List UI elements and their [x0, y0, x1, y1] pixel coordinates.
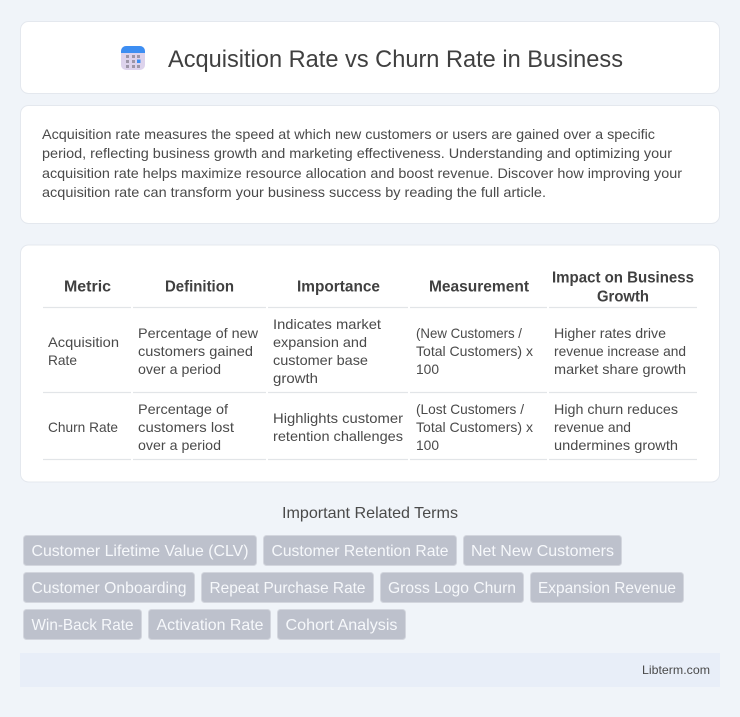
table row: acquisition rate: revenue increase and: [554, 343, 686, 359]
tag: net new customers: Net New Customers: [471, 543, 614, 560]
tag: customer retention rate: [264, 536, 456, 566]
table row: acquisition rate: market share growth: [554, 361, 686, 377]
text block: introduction: Acquisition rate measures the speed at which new customers or users are gained over a specific: [42, 126, 655, 142]
table row: acquisition rate: Total Customers) x: [416, 343, 533, 359]
heading: related terms: Important Related Terms: [282, 505, 458, 522]
table row: churn rate: retention challenges: [273, 428, 403, 444]
table row: acquisition rate: [48, 316, 686, 386]
tag: cohort analysis: Cohort Analysis: [286, 617, 398, 634]
table row: churn rate: 100: [416, 437, 439, 453]
table header row: Impact on Business: [552, 270, 694, 286]
tag: gross logo churn: [380, 572, 524, 602]
table row: acquisition rate: customers gained: [138, 343, 253, 359]
tag: win-back rate: [24, 610, 142, 640]
text block: introduction: acquisition rate can transform your business success by reading the full article.: [42, 184, 546, 200]
tag: gross logo churn: Gross Logo Churn: [388, 580, 516, 597]
footer credit: Libterm.com: [642, 663, 710, 677]
tag: repeat purchase rate: [202, 572, 374, 602]
table row: acquisition rate: Rate: [48, 352, 77, 368]
table row: churn rate: customers lost: [138, 419, 234, 435]
panel: comparison table: [20, 245, 720, 482]
table row: acquisition rate: 100: [416, 361, 439, 377]
table row: churn rate: over a period: [138, 437, 221, 453]
table header row: Definition: [165, 278, 234, 296]
table header row: [64, 270, 694, 306]
table row: churn rate: Highlights customer: [273, 410, 403, 426]
tag: expansion revenue: [530, 572, 684, 602]
table row: acquisition rate: Acquisition: [48, 334, 119, 350]
table row: churn rate: Churn Rate: [48, 419, 118, 435]
table header row: Measurement: [429, 278, 530, 296]
tag: activation rate: Activation Rate: [156, 617, 264, 634]
tag: customer onboarding: Customer Onboarding: [32, 580, 186, 597]
tag: activation rate: [148, 610, 270, 640]
table row: acquisition rate: Indicates market: [273, 316, 381, 332]
footer bar: [20, 653, 720, 687]
icon: calendar: [121, 46, 145, 70]
table header row: Importance: [297, 278, 380, 296]
table row: churn rate: Percentage of: [138, 401, 228, 417]
panel: intro text card: [20, 106, 720, 224]
related term tags: [24, 536, 684, 640]
table row: acquisition rate: growth: [273, 370, 318, 386]
tag: repeat purchase rate: Repeat Purchase Rate: [210, 580, 366, 597]
tag: cohort analysis: [278, 610, 406, 640]
table row: churn rate: (Lost Customers /: [416, 401, 524, 417]
table row: acquisition rate: over a period: [138, 361, 221, 377]
tag: customer onboarding: [24, 572, 194, 602]
tag: customer retention rate: Customer Retention Rate: [272, 543, 449, 560]
text block: introduction: [42, 126, 682, 200]
table header row: Metric: [64, 278, 111, 296]
tag: expansion revenue: Expansion Revenue: [538, 580, 676, 597]
table row: acquisition rate: Higher rates drive: [554, 325, 666, 341]
table row: churn rate: revenue and: [554, 419, 631, 435]
table row: churn rate: High churn reduces: [554, 401, 678, 417]
table row: acquisition rate: customer base: [273, 352, 368, 368]
text block: introduction: acquisition rate helps maximize resource allocation and boost revenue. Discover how improving your: [42, 165, 682, 181]
tag: customer lifetime value: [24, 536, 256, 566]
table header row: Growth: [597, 288, 649, 306]
table row: acquisition rate: expansion and: [273, 334, 367, 350]
table row: acquisition rate: (New Customers /: [416, 325, 522, 341]
table row: churn rate: Total Customers) x: [416, 419, 533, 435]
tag: net new customers: [464, 536, 622, 566]
panel: title card: [20, 22, 720, 94]
table row: churn rate: [48, 401, 678, 453]
tag: customer lifetime value: Customer Lifetime Value (CLV): [32, 543, 248, 560]
text block: introduction: period, reflecting business growth and marketing effectiveness. Understanding and optimizing your: [42, 145, 672, 161]
table row: acquisition rate: Percentage of new: [138, 325, 259, 341]
tag: win-back rate: Win-Back Rate: [32, 617, 134, 634]
title: Acquisition Rate vs Churn Rate in Business: [168, 46, 623, 73]
table row: churn rate: undermines growth: [554, 437, 678, 453]
